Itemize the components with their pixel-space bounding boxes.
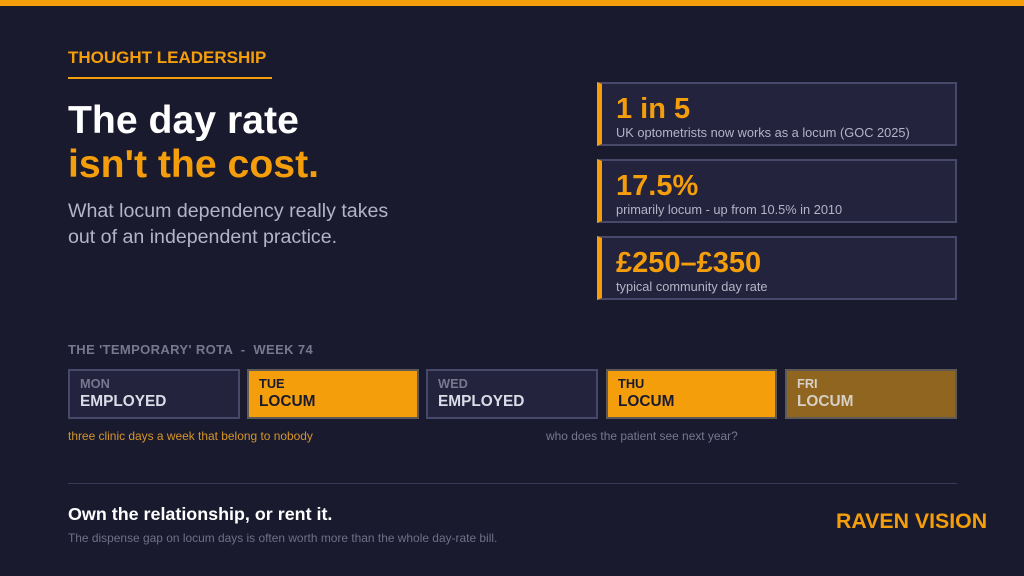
title: isn't the cost.: [68, 143, 319, 186]
rota heading: THE 'TEMPORARY' ROTA - WEEK 74: [68, 342, 313, 357]
rota note: right: who does the patient see next year?: [546, 429, 738, 443]
stat value: 17.5%: [616, 170, 698, 202]
rota day: Monday: [68, 369, 240, 419]
rota day: Friday: [785, 369, 957, 419]
stat card: day rate: [597, 236, 957, 300]
day name: THU: [618, 376, 644, 391]
title: The day rate: [68, 99, 299, 142]
closing note: The dispense gap on locum days is often worth more than the whole day-rate bill.: [68, 531, 497, 545]
day status: EMPLOYED: [80, 393, 166, 410]
rota day: Wednesday: [426, 369, 598, 419]
closing headline: Own the relationship, or rent it.: [68, 504, 332, 524]
stat card: 17.5%: [597, 159, 957, 223]
day status: EMPLOYED: [438, 393, 524, 410]
stat description: typical community day rate: [616, 279, 768, 294]
rota note: left: three clinic days a week that belong to nobody: [68, 429, 313, 443]
stat card: 1 in 5: [597, 82, 957, 146]
stat value: 1 in 5: [616, 93, 690, 125]
eyebrow: thought leadership: [68, 49, 272, 79]
day name: MON: [80, 376, 110, 391]
rota day: Tuesday: [247, 369, 419, 419]
day name: TUE: [259, 376, 285, 391]
day status: LOCUM: [797, 393, 853, 410]
brand: Raven Vision: RAVEN VISION: [836, 509, 987, 533]
day name: WED: [438, 376, 468, 391]
top accent bar: [0, 0, 1024, 6]
subtitle: What locum dependency really takes: [68, 200, 388, 222]
subtitle: out of an independent practice.: [68, 226, 337, 248]
day status: LOCUM: [259, 393, 315, 410]
title: [68, 99, 319, 186]
eyebrow: thought leadership: THOUGHT LEADERSHIP: [68, 48, 266, 67]
subtitle: [68, 200, 388, 248]
stat description: primarily locum - up from 10.5% in 2010: [616, 202, 842, 217]
rota day: Thursday: [606, 369, 777, 419]
day name: FRI: [797, 376, 818, 391]
day status: LOCUM: [618, 393, 674, 410]
stat description: UK optometrists now works as a locum (GOC 2025): [616, 125, 910, 140]
stat value: £250–£350: [616, 247, 761, 279]
